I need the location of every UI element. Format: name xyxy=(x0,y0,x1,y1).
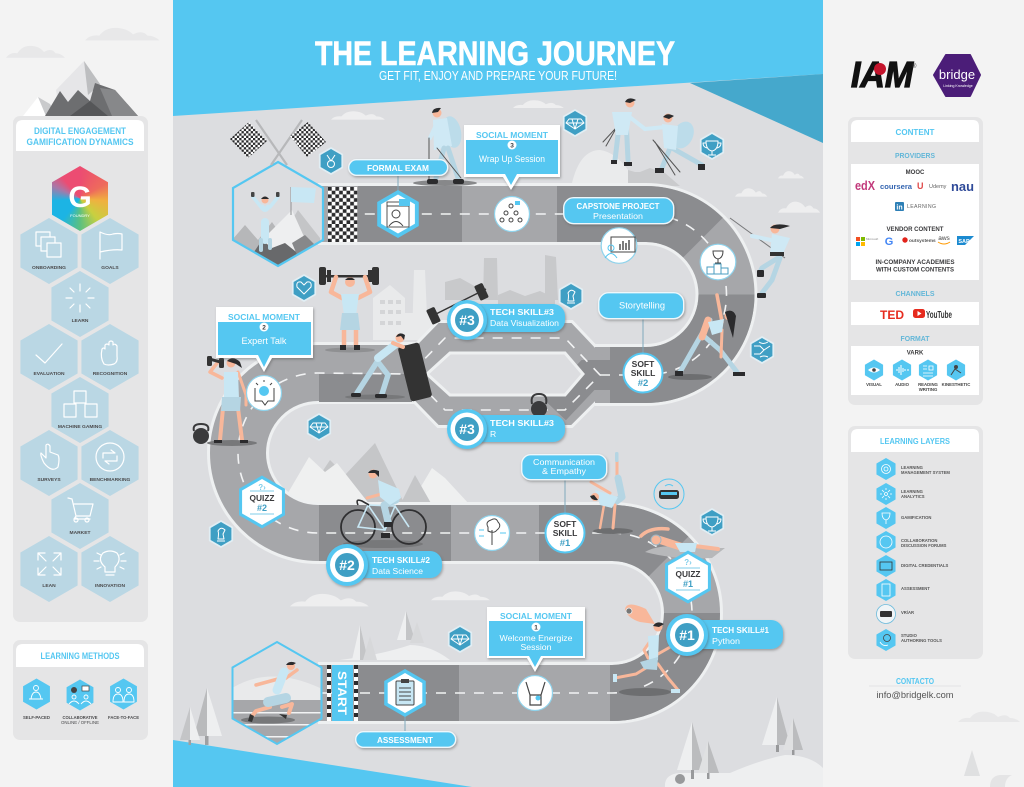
banner dark corner xyxy=(690,74,823,143)
contact block: CONTACTO xyxy=(896,677,934,686)
label: tech skill 3 data visualization: TECH SKILL#3 xyxy=(490,307,554,317)
panel header xyxy=(16,120,144,151)
centre dashes xyxy=(238,214,727,693)
panel: gamification dynamics: MACHINE GAMING xyxy=(58,424,102,430)
hex icons xyxy=(36,232,126,575)
panel: learning layers xyxy=(848,426,983,659)
format block: VISUAL xyxy=(866,382,882,387)
icon: G foundry hexagon: FOUNDRY xyxy=(70,213,90,218)
figure: runner with stopwatch xyxy=(613,604,680,696)
node: soft skill 2: #2 xyxy=(638,378,648,389)
finish hexagon xyxy=(232,162,325,270)
node: formal exam hexagon xyxy=(377,190,419,238)
providers block: U xyxy=(917,181,924,191)
road dark sections xyxy=(319,214,726,693)
figure: yoga stretch woman xyxy=(668,295,745,380)
callout: social moment 2: 2 xyxy=(262,324,266,332)
channels heading: CHANNELS xyxy=(896,289,934,298)
node: quizz 1: QUIZZ xyxy=(676,569,700,579)
providers block: IN-COMPANY ACADEMIES xyxy=(876,259,954,266)
format block xyxy=(851,346,979,395)
hex labels: ONBOARDING xyxy=(32,265,66,271)
label: tech skill 1: Python xyxy=(712,636,740,646)
figure: swimmer xyxy=(641,529,725,558)
providers heading: PROVIDERS xyxy=(895,151,935,160)
providers block: MOOC xyxy=(906,170,925,176)
label: tech skill 3 R xyxy=(447,409,565,449)
panel: learning layers: AUTHORING TOOLS xyxy=(901,638,942,643)
label: tech skill 3 data visualization xyxy=(447,300,565,340)
icon: kettlebell left xyxy=(193,424,209,444)
providers block: VENDOR CONTENT xyxy=(886,226,944,233)
panel: gamification dynamics: SURVEYS xyxy=(37,477,61,483)
panel: learning methods: LEARNING METHODS xyxy=(40,651,120,661)
format block: READING xyxy=(918,382,939,387)
providers block: WITH CUSTOM CONTENTS xyxy=(876,266,954,274)
callout: social moment 1: SOCIAL MOMENT xyxy=(500,611,573,621)
figure: weightlifter xyxy=(319,267,379,352)
callout: social moment 3 xyxy=(464,125,560,190)
panel: gamification dynamics: EVALUATION xyxy=(33,371,65,377)
node: soft skill 1: #1 xyxy=(560,538,571,549)
panel: learning layers: LEARNING xyxy=(901,489,923,494)
VR badge xyxy=(654,479,684,509)
label: capstone project: Presentation xyxy=(593,211,643,221)
icon: kettlebell road xyxy=(531,394,547,417)
start hexagon xyxy=(232,642,322,746)
label: tech skill 2: TECH SKILL#2 xyxy=(372,555,430,565)
node: soft skill 2 xyxy=(624,354,662,392)
node: soft skill 1: SOFT xyxy=(554,519,577,529)
providers block: Udemy xyxy=(929,184,947,190)
figure: woman with dumbbell xyxy=(207,356,257,446)
node: quizz 1: #1 xyxy=(683,579,693,589)
contact block xyxy=(869,677,961,701)
channels block: TED xyxy=(880,308,904,322)
node: quizz 2 xyxy=(239,476,285,528)
node: quizz 2: QUIZZ xyxy=(250,493,274,503)
node: soft skill 2: SKILL xyxy=(631,368,655,378)
node: vest circle xyxy=(518,676,552,710)
panel: learning layers: DIGITAL CREDENTIALS xyxy=(901,563,949,568)
panel: content: CONTENT xyxy=(896,127,935,137)
figure: hikers shaking hands xyxy=(603,98,705,175)
method icons xyxy=(23,678,137,710)
loop hole xyxy=(427,353,583,395)
node: assessment hexagon xyxy=(384,669,426,717)
providers block: SAP xyxy=(958,239,970,245)
label: tech skill 2 xyxy=(326,544,442,586)
panel: gamification dynamics: RECOGNITION xyxy=(93,371,128,377)
node: quizz 2: ?› xyxy=(258,483,266,492)
G foundry placeholder ring xyxy=(50,164,110,234)
panel: learning layers: ANALYTICS xyxy=(901,494,925,499)
panel: learning layers: VR/AR xyxy=(901,610,914,615)
figure: climbing woman xyxy=(730,218,790,298)
figure: man pushing tyre xyxy=(345,333,432,402)
road inner edge cover xyxy=(322,187,326,242)
board clouds xyxy=(290,100,820,606)
node: podium trophy circle xyxy=(700,244,736,280)
panel: learning layers: ASSESSMENT xyxy=(901,586,930,591)
label: tech skill 1: TECH SKILL#1 xyxy=(712,625,769,635)
panel: learning methods: FACE-TO-FACE xyxy=(108,715,140,721)
node: soft skill 1: SKILL xyxy=(553,528,577,538)
label: storytelling xyxy=(599,293,684,355)
panel: learning layers: LEARNING LAYERS xyxy=(880,436,950,446)
label: tech skill 1 xyxy=(666,614,783,656)
node: quizz 1: ?› xyxy=(684,558,692,567)
layer VR icon xyxy=(876,604,896,624)
start line: START xyxy=(335,671,349,716)
callout: social moment 3: Wrap Up Session xyxy=(479,154,545,164)
label: tech skill 3 data visualization: #3 xyxy=(459,312,475,328)
label: formal exam xyxy=(349,160,448,191)
layers header xyxy=(851,429,979,452)
providers block: outsystems xyxy=(909,238,936,244)
label: communication and empathy xyxy=(522,455,607,480)
icon glyphs xyxy=(217,119,770,645)
panel: gamification dynamics: LEAN xyxy=(42,583,56,589)
panel: learning methods xyxy=(13,640,148,740)
label: tech skill 3 R: #3 xyxy=(459,421,475,437)
panel: gamification dynamics: BENCHMARKING xyxy=(90,477,131,483)
panel: learning methods: ONLINE / OFFLINE xyxy=(61,720,100,726)
label: tech skill 3 R: R xyxy=(490,429,496,439)
label: assessment: ASSESSMENT xyxy=(377,735,434,745)
rocky ledge xyxy=(628,168,680,186)
panel: learning methods: COLLABORATIVE xyxy=(62,715,98,721)
city skyline xyxy=(373,255,558,340)
callout: social moment 1 xyxy=(487,607,585,672)
mountains behind cyclist xyxy=(285,443,470,505)
callout: social moment 3: 3 xyxy=(510,142,514,150)
figure: barbell on road xyxy=(426,283,489,325)
hill behind hikers xyxy=(572,150,640,183)
channels block xyxy=(851,302,979,325)
panel: gamification dynamics: LEARN xyxy=(72,318,89,324)
panel: learning layers: STUDIO xyxy=(901,633,918,638)
label: tech skill 1: #1 xyxy=(679,627,695,643)
callout: social moment 1: Welcome Energize xyxy=(500,633,573,643)
logo: IAM: ® xyxy=(912,63,917,70)
node: quizz 2: #2 xyxy=(257,503,267,513)
providers block: G xyxy=(885,236,893,248)
finish checker xyxy=(328,187,358,242)
callout: social moment 3: SOCIAL MOMENT xyxy=(476,130,549,140)
callout: social moment 2 xyxy=(216,307,313,372)
providers block: nau xyxy=(951,179,974,194)
panel: learning layers: DISCUSSION FORUMS xyxy=(901,543,947,548)
mountain illustration xyxy=(23,61,138,116)
figure: hiker with poles xyxy=(413,108,477,186)
panel: gamification dynamics: GAMIFICATION DYNAMICS xyxy=(26,137,134,147)
road xyxy=(238,214,727,693)
panel: gamification dynamics: MARKET xyxy=(70,530,90,536)
logo: bridge xyxy=(934,55,980,96)
label: assessment xyxy=(356,717,456,747)
node: quizz 1 xyxy=(665,550,711,604)
format heading: FORMAT xyxy=(900,334,930,343)
label: capstone project xyxy=(564,198,674,224)
label: formal exam: FORMAL EXAM xyxy=(367,163,429,173)
node: soft skill 2: SOFT xyxy=(632,359,655,369)
providers block: in xyxy=(896,204,903,212)
label: tech skill 3 data visualization: Data Visualization xyxy=(490,318,559,328)
providers block xyxy=(851,164,979,280)
label: capstone project: CAPSTONE PROJECT xyxy=(576,201,660,211)
providers block: edX xyxy=(855,179,876,193)
node: palm circle xyxy=(474,516,510,550)
small badges xyxy=(209,109,774,653)
subtitle: GET FIT, ENJOY AND PREPARE YOUR FUTURE! xyxy=(379,69,617,83)
layer labels: LEARNING xyxy=(901,465,923,470)
providers block: LEARNING xyxy=(907,204,936,210)
panel: journey board background xyxy=(173,0,823,787)
panel: learning layers: COLLABORATION xyxy=(901,538,937,543)
format block: VARK xyxy=(907,350,924,356)
title: THE LEARNING JOURNEY xyxy=(315,35,675,73)
logo: bridge: bridge xyxy=(939,67,975,82)
node: presentation circle xyxy=(601,228,637,263)
footer banner xyxy=(173,740,472,787)
providers block: aws xyxy=(938,235,951,242)
layer icons xyxy=(876,458,896,651)
label: storytelling: Storytelling xyxy=(619,300,665,310)
contact block: info@bridgelk.com xyxy=(876,690,954,701)
providers block: Microsoft xyxy=(866,237,878,241)
node: wrap up circle xyxy=(494,196,530,232)
start line xyxy=(327,665,358,721)
callout: social moment 2: SOCIAL MOMENT xyxy=(228,312,301,322)
providers block: coursera xyxy=(880,184,912,191)
panel: learning methods: SELF-PACED xyxy=(23,715,50,721)
node: expert talk circle xyxy=(246,376,282,410)
icon: G foundry hexagon: G xyxy=(68,181,92,214)
figure: handstand gymnast xyxy=(590,452,633,534)
label: communication and empathy: & Empathy xyxy=(542,466,587,476)
content header xyxy=(851,120,979,142)
label: tech skill 3 R: TECH SKILL#3 xyxy=(490,418,554,428)
label: tech skill 2: #2 xyxy=(339,557,355,573)
label: communication and empathy: Communication xyxy=(533,457,595,467)
header banner xyxy=(173,0,823,116)
panel: gamification dynamics: INNOVATION xyxy=(95,583,125,589)
icon: crossed checkered flags xyxy=(230,120,326,165)
label: tech skill 2: Data Science xyxy=(372,566,423,576)
callout: social moment 1: 1 xyxy=(534,624,538,632)
format block: KINESTHETIC xyxy=(942,382,970,387)
logo: bridge: Linking Knowledge xyxy=(943,84,973,88)
hex grid xyxy=(20,218,139,602)
panel: learning layers: GAMIFICATION xyxy=(901,515,931,520)
format block: AUDIO xyxy=(895,382,910,387)
panel: content xyxy=(848,117,983,405)
icon: G foundry hexagon xyxy=(52,166,108,231)
callout: social moment 1: Session xyxy=(520,642,552,652)
layer glyphs xyxy=(880,464,892,646)
channels block: YouTube xyxy=(926,310,952,321)
panel: gamification dynamics: GOALS xyxy=(101,265,119,271)
panel: learning layers: MANAGEMENT SYSTEM xyxy=(901,470,950,475)
logo: IAM: IAM xyxy=(851,54,914,95)
node: soft skill 1 xyxy=(546,480,584,552)
methods header xyxy=(16,644,144,667)
figure: cyclist xyxy=(341,470,426,548)
panel: gamification dynamics xyxy=(13,116,148,622)
panel: gamification dynamics: DIGITAL ENGAGEMENT xyxy=(34,126,126,136)
callout: social moment 2: Expert Talk xyxy=(242,336,287,346)
format block: WRITING xyxy=(919,387,938,392)
trees and hills xyxy=(180,611,1012,787)
